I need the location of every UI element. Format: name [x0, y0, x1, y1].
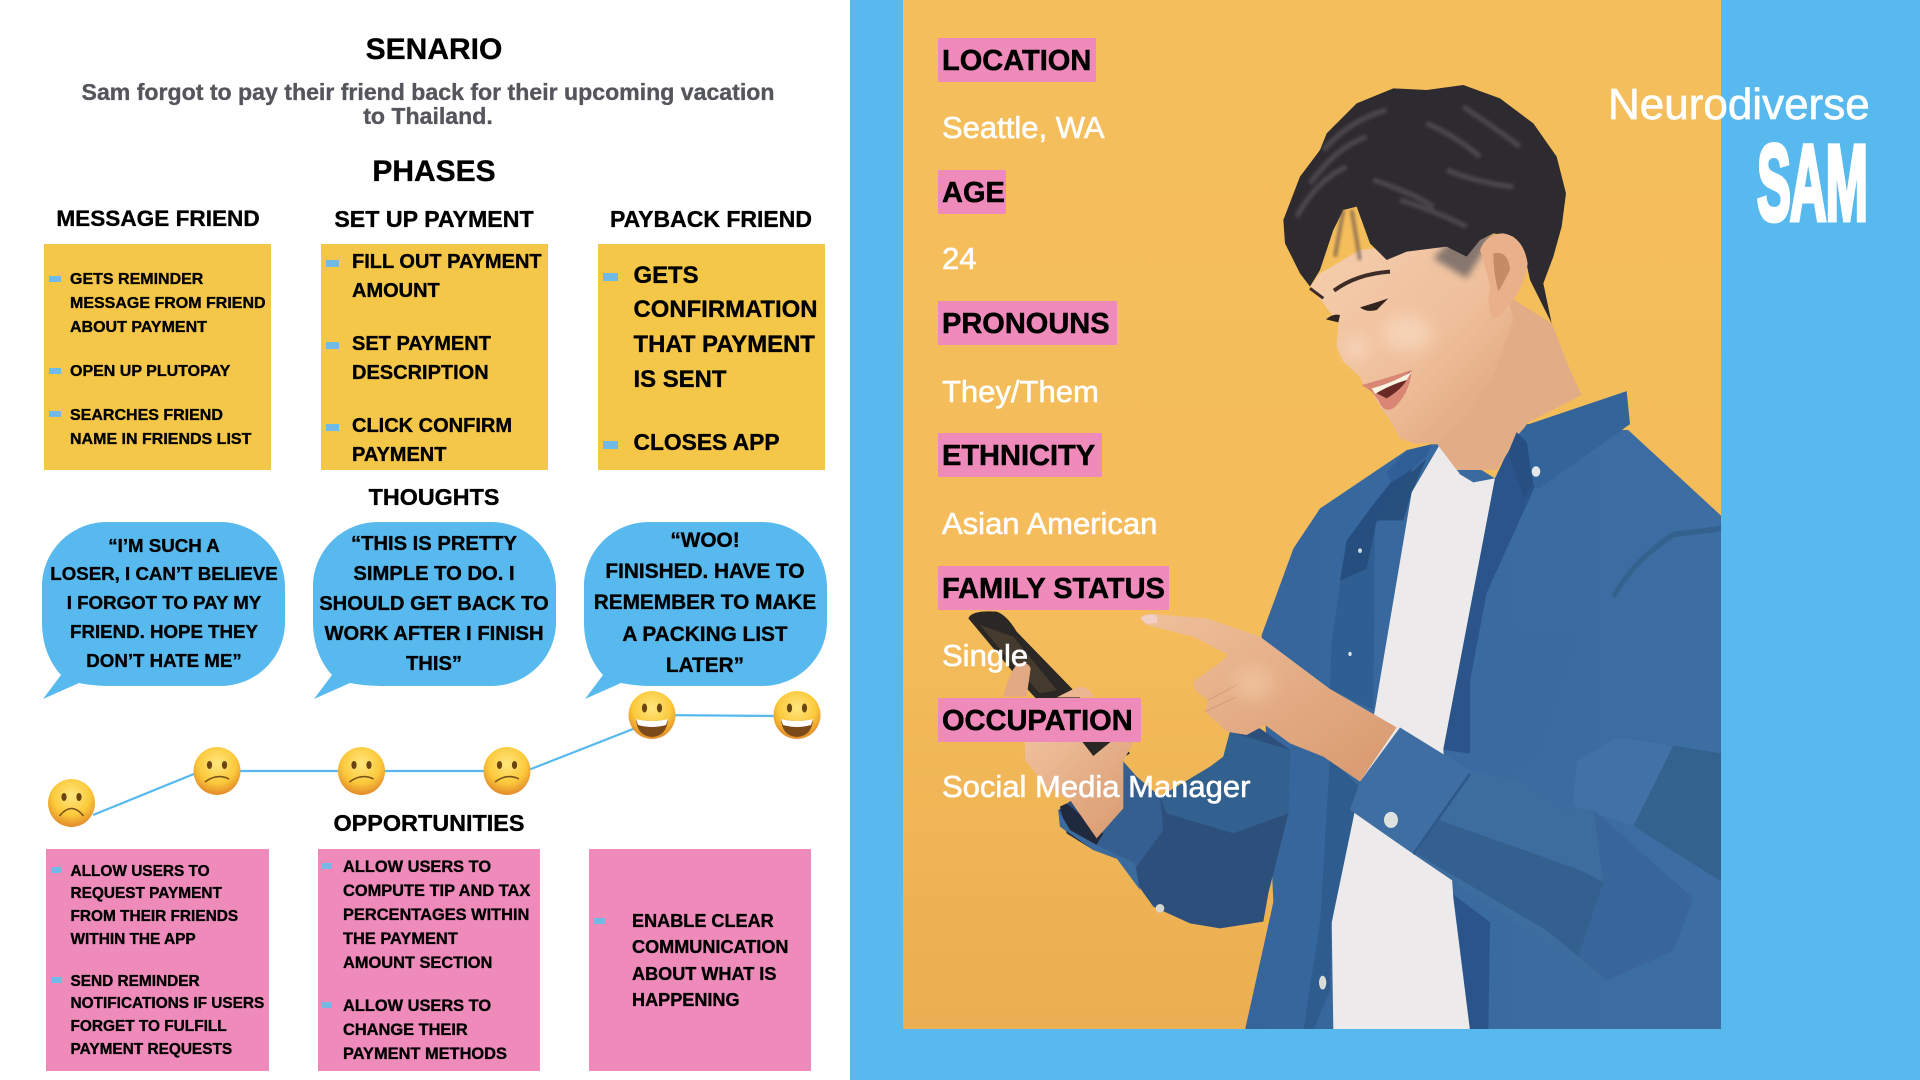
phase card: message friend: MESSAGE FROM FRIEND	[70, 295, 266, 312]
scenario description: Sam forgot to pay their friend back for their upcoming vacation	[82, 79, 774, 105]
pointing hand	[1140, 614, 1397, 782]
opportunity card: tip and payment methods: AMOUNT SECTION	[343, 954, 492, 972]
opportunity card: payment requests: ALLOW USERS TO	[70, 862, 210, 880]
opportunity card: tip and payment methods: PAYMENT METHODS	[343, 1045, 507, 1063]
opportunity card: payment requests: WITHIN THE APP	[70, 931, 196, 948]
opportunity card: clear communication	[589, 849, 811, 1071]
phase card: payback friend: THAT PAYMENT	[634, 331, 815, 358]
opportunity card: payment requests: PAYMENT REQUESTS	[70, 1041, 232, 1058]
opportunity card: clear communication: HAPPENING	[632, 990, 740, 1010]
emoji: sad	[48, 779, 95, 827]
value: ethnicity: Asian American	[942, 506, 1157, 541]
opportunity card: payment requests: SEND REMINDER	[70, 972, 200, 990]
opportunity card: clear communication: ABOUT WHAT IS	[632, 964, 776, 984]
heading: opportunities: OPPORTUNITIES	[333, 810, 525, 836]
speech bubble: thought three: “WOO!	[670, 529, 740, 552]
opportunity card: tip and payment methods: THE PAYMENT	[343, 930, 458, 948]
photo: Sam pointing at a phone on an orange backdrop	[903, 0, 1721, 1029]
opportunity card: tip and payment methods: ALLOW USERS TO	[343, 858, 491, 876]
phase card: message friend: NAME IN FRIENDS LIST	[70, 430, 251, 448]
speech bubble: thought one: “I’M SUCH A	[108, 535, 220, 556]
opportunity card: tip and payment methods	[318, 849, 540, 1071]
phase card: message friend	[44, 244, 271, 470]
label: location	[938, 38, 1096, 82]
phase card: payback friend: GETS	[634, 262, 699, 289]
opportunity card: payment requests: FORGET TO FULFILL	[70, 1018, 227, 1035]
opportunity card: clear communication: ENABLE CLEAR	[632, 911, 774, 931]
speech bubble: thought one: FRIEND. HOPE THEY	[70, 621, 258, 642]
panel: blue persona background	[850, 0, 1920, 1080]
value: occupation: Social Media Manager	[942, 769, 1250, 804]
phase card: payback friend: IS SENT	[634, 366, 726, 393]
speech bubble: thought two: WORK AFTER I FINISH	[324, 622, 544, 644]
speech bubble: thought one: DON’T HATE ME”	[86, 650, 242, 671]
phase heading: payback friend: PAYBACK FRIEND	[610, 206, 812, 232]
head: face, hair and ear	[1283, 85, 1566, 444]
opportunity card: clear communication: COMMUNICATION	[632, 937, 788, 957]
phase card: payback friend: CONFIRMATION	[634, 296, 818, 323]
value: location: Seattle, WA	[942, 110, 1105, 145]
attributes: persona details	[938, 38, 1250, 804]
label: age: AGE	[942, 177, 1005, 209]
label: pronouns	[938, 301, 1117, 345]
label: occupation: OCCUPATION	[942, 705, 1133, 737]
speech bubble: thought one: I FORGOT TO PAY MY	[67, 592, 261, 613]
persona subtitle: neurodiverse: Neurodiverse	[1608, 80, 1870, 128]
left arm sleeve, phone and holding hand	[968, 611, 1290, 928]
label: ethnicity: ETHNICITY	[942, 440, 1095, 472]
speech bubble: thought three: REMEMBER TO MAKE	[594, 591, 816, 614]
speech bubble: thought two: SIMPLE TO DO. I	[353, 562, 515, 584]
emoji: uneasy one	[194, 747, 240, 795]
phase card: set up payment: PAYMENT	[352, 444, 446, 466]
emoji: uneasy two	[338, 747, 385, 795]
title: scenario: SENARIO	[366, 32, 502, 66]
scenario description	[82, 79, 774, 128]
opportunity card: tip and payment methods: COMPUTE TIP AND TAX	[343, 882, 530, 900]
panel: journey map	[0, 0, 850, 1080]
label: family status: FAMILY STATUS	[942, 573, 1165, 605]
speech bubble: thought three: A PACKING LIST	[622, 623, 788, 646]
phase card: payback friend	[598, 244, 825, 470]
speech bubble: thought three	[584, 522, 827, 699]
speech bubble: thought three: LATER”	[666, 654, 744, 677]
phase card: message friend: ABOUT PAYMENT	[70, 319, 207, 336]
label: age	[938, 170, 1006, 214]
scenario description: to Thailand.	[363, 102, 493, 128]
phase card: set up payment: SET PAYMENT	[352, 333, 491, 355]
value: family status: Single	[942, 638, 1028, 673]
phase heading: set up payment: SET UP PAYMENT	[334, 206, 534, 232]
phase card: payback friend: CLOSES APP	[634, 429, 780, 455]
chart: emotional journey line with emoji	[48, 691, 820, 827]
journey line	[93, 715, 778, 815]
speech bubble: thought one	[42, 522, 285, 699]
label: location: LOCATION	[942, 45, 1091, 77]
heading: phases: PHASES	[372, 154, 496, 188]
label: occupation	[938, 698, 1141, 742]
emoji: happy one	[628, 691, 676, 739]
label: ethnicity	[938, 433, 1102, 477]
speech bubble: thought three: FINISHED. HAVE TO	[605, 560, 805, 583]
speech bubble: thought two: SHOULD GET BACK TO	[319, 592, 549, 614]
right sleeve and cuff	[1350, 727, 1693, 981]
phase card: set up payment: FILL OUT PAYMENT	[352, 251, 542, 273]
phase card: set up payment	[321, 244, 548, 470]
opportunity card: payment requests: FROM THEIR FRIENDS	[70, 908, 238, 925]
phase card: set up payment: CLICK CONFIRM	[352, 414, 512, 436]
opportunity card: tip and payment methods: CHANGE THEIR	[343, 1021, 468, 1039]
value: age: 24	[942, 241, 976, 276]
emoji: happy two	[774, 691, 820, 739]
opportunity card: tip and payment methods: PERCENTAGES WITHIN	[343, 906, 529, 924]
phase card: message friend: SEARCHES FRIEND	[70, 406, 223, 424]
phase card: set up payment: AMOUNT	[352, 280, 440, 302]
opportunity card: payment requests	[46, 849, 269, 1071]
opportunity card: payment requests: NOTIFICATIONS IF USERS	[70, 995, 264, 1012]
opportunity card: tip and payment methods: ALLOW USERS TO	[343, 997, 491, 1015]
emoji: uneasy three	[484, 747, 530, 795]
value: pronouns: They/Them	[942, 374, 1099, 409]
phase card: set up payment: DESCRIPTION	[352, 362, 489, 384]
phase heading: message friend: MESSAGE FRIEND	[56, 206, 260, 231]
speech bubble: thought two: THIS”	[406, 652, 462, 674]
phase card: message friend: GETS REMINDER	[70, 271, 203, 288]
speech bubble: thought two	[313, 522, 556, 699]
shirt collars and collar button	[1373, 391, 1630, 521]
speech bubble: thought two: “THIS IS PRETTY	[351, 532, 517, 554]
label: pronouns: PRONOUNS	[942, 308, 1110, 340]
speech bubble: thought one: LOSER, I CAN’T BELIEVE	[50, 563, 278, 584]
opportunity card: payment requests: REQUEST PAYMENT	[70, 885, 222, 902]
heading: thoughts: THOUGHTS	[369, 484, 499, 510]
photo backdrop	[903, 0, 1721, 1029]
phase card: message friend: OPEN UP PLUTOPAY	[70, 362, 230, 380]
shirt torso and t-shirt	[1245, 424, 1722, 1030]
neck	[1427, 287, 1582, 470]
